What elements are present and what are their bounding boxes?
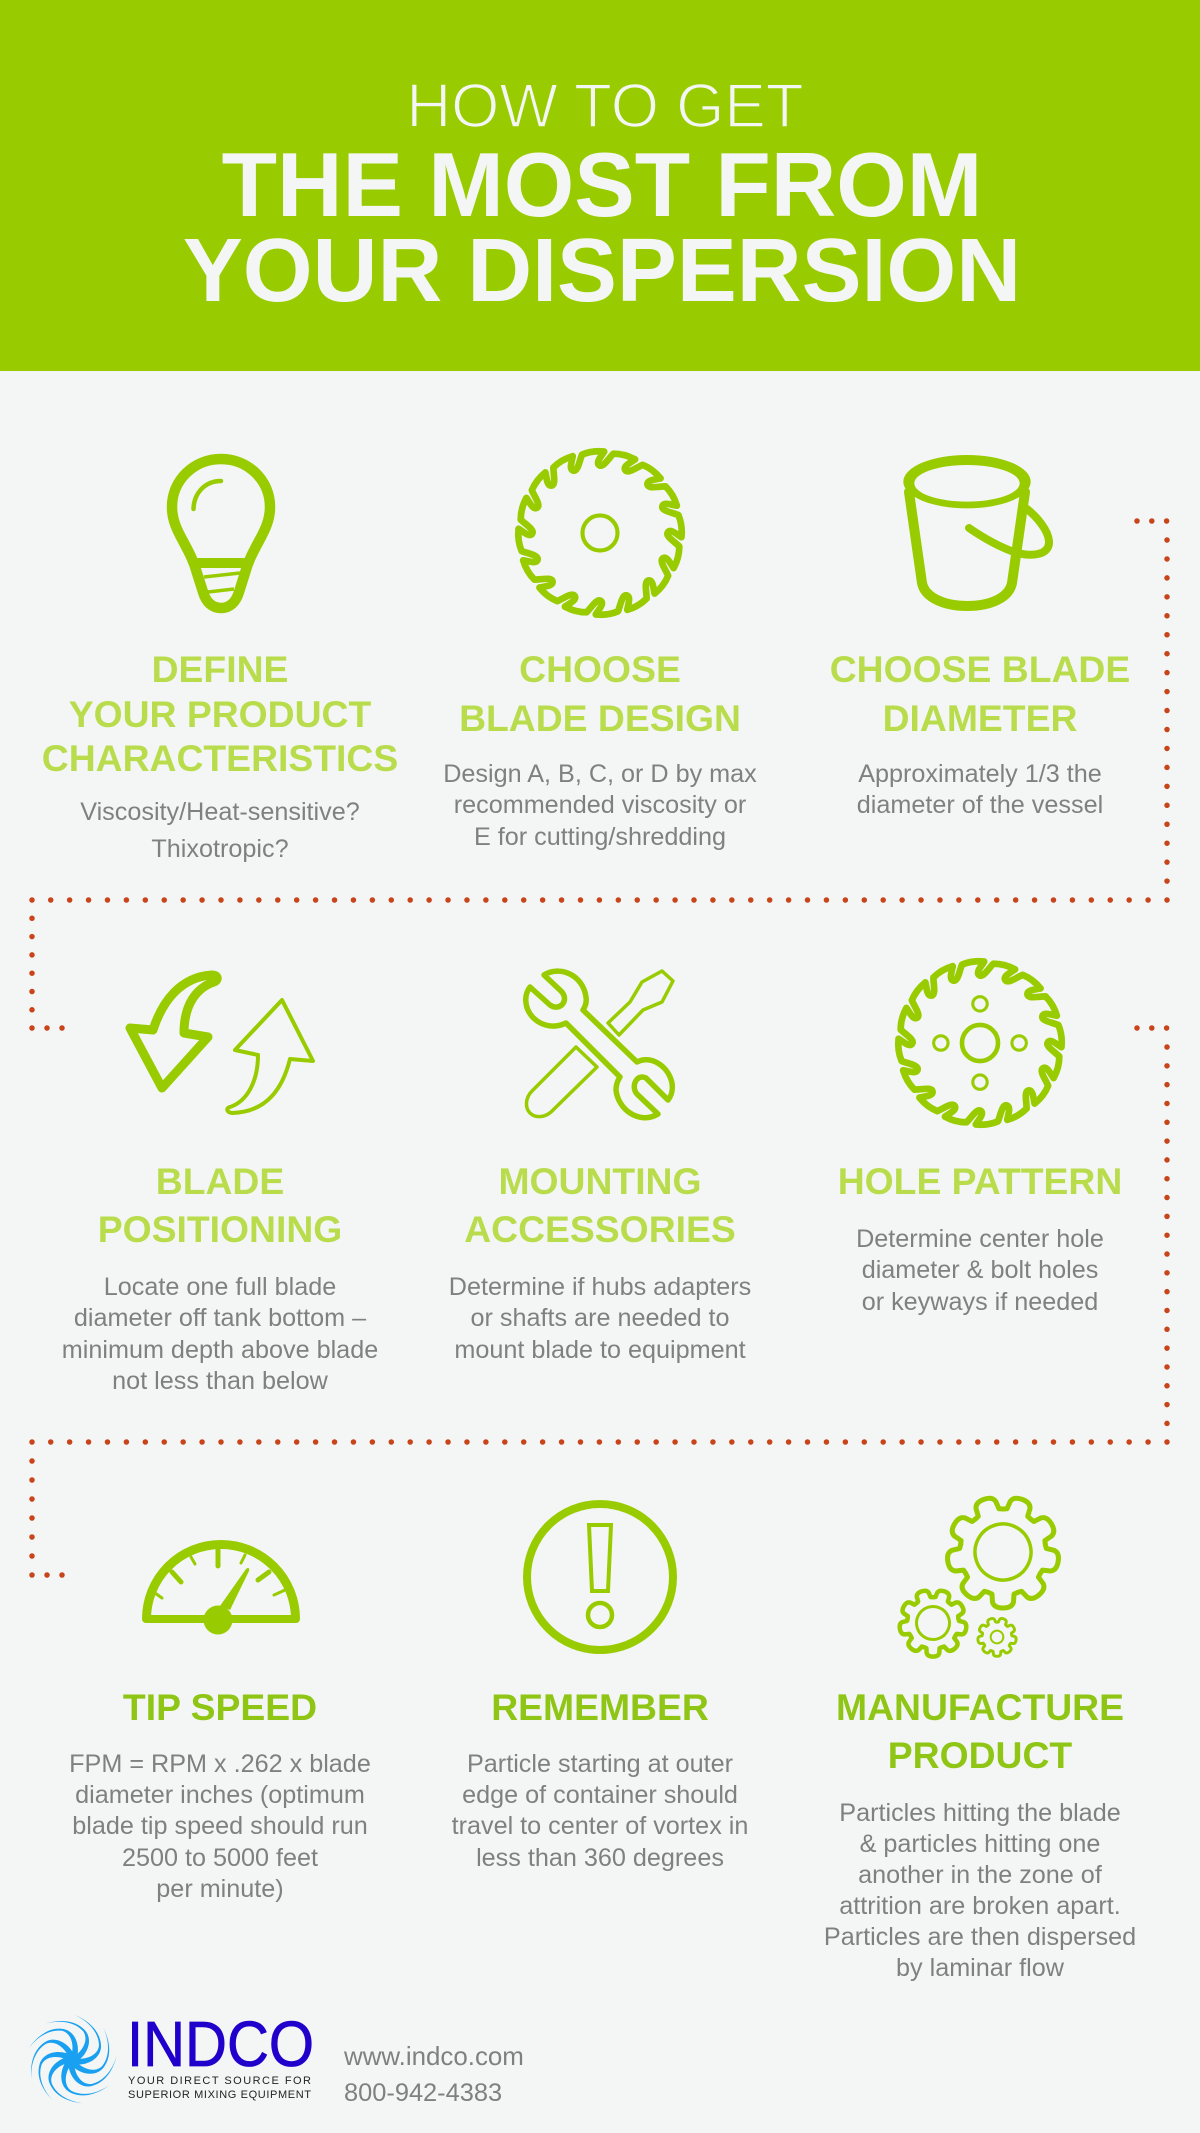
heading: DEFINE — [152, 648, 288, 690]
icon: bucket — [903, 455, 1049, 606]
logo: wordmark: INDCO — [127, 2008, 314, 2080]
description: 2500 to 5000 feet — [122, 1844, 318, 1872]
header banner — [0, 0, 1200, 371]
logo: wordmark: YOUR DIRECT SOURCE FOR — [128, 2075, 311, 2087]
description: blade tip speed should run — [72, 1812, 368, 1840]
description: travel to center of vortex in — [452, 1812, 748, 1840]
panel: manufacture product — [824, 1480, 1136, 1982]
heading: HOLE PATTERN — [838, 1160, 1122, 1202]
description: per minute) — [156, 1875, 284, 1903]
description: Locate one full blade — [104, 1273, 336, 1301]
description: diameter of the vessel — [857, 791, 1103, 819]
contact details — [343, 2043, 524, 2107]
contact details: www.indco.com — [343, 2043, 524, 2071]
heading: BLADE — [156, 1160, 284, 1202]
title: THE MOST FROM — [222, 135, 982, 236]
heading: ACCESSORIES — [464, 1208, 736, 1250]
description: Particle starting at outer — [467, 1750, 733, 1778]
icon: gears — [889, 1480, 1077, 1667]
logo: wordmark: SUPERIOR MIXING EQUIPMENT — [128, 2089, 311, 2101]
description: & particles hitting one — [860, 1830, 1100, 1858]
description: not less than below — [112, 1367, 329, 1395]
heading: CHOOSE — [519, 648, 681, 690]
panel: hole pattern — [838, 954, 1122, 1316]
icon: saw blade with bolt holes — [891, 954, 1069, 1132]
contact details: 800-942-4383 — [344, 2079, 502, 2107]
icon: speedometer — [146, 1545, 296, 1634]
panel: define your product characteristics — [42, 459, 398, 863]
description: or keyways if needed — [862, 1288, 1098, 1316]
panel: remember — [452, 1504, 748, 1872]
description: diameter inches (optimum — [75, 1781, 365, 1809]
heading: YOUR PRODUCT — [69, 693, 371, 735]
description: Design A, B, C, or D by max — [443, 760, 757, 788]
icon: light bulb — [172, 459, 270, 608]
icon: wrench and screwdriver — [526, 971, 673, 1118]
panel: tip speed — [69, 1545, 371, 1903]
footer — [19, 2007, 524, 2112]
icon: rotation arrows — [130, 975, 313, 1113]
description: diameter & bolt holes — [862, 1256, 1098, 1284]
heading: CHARACTERISTICS — [42, 737, 398, 779]
description: by laminar flow — [896, 1954, 1065, 1982]
heading: POSITIONING — [98, 1208, 342, 1250]
title: HOW TO GET — [406, 72, 804, 141]
icon: exclamation circle — [527, 1504, 673, 1650]
heading: BLADE DESIGN — [459, 697, 741, 739]
title — [183, 72, 1021, 321]
heading: PRODUCT — [888, 1734, 1072, 1776]
description: Approximately 1/3 the — [858, 760, 1102, 788]
heading: DIAMETER — [883, 697, 1077, 739]
description: less than 360 degrees — [476, 1844, 724, 1872]
logo: swirl — [19, 2007, 123, 2112]
description: diameter off tank bottom – — [74, 1304, 366, 1332]
description: Particles hitting the blade — [839, 1799, 1121, 1827]
heading: TIP SPEED — [123, 1686, 317, 1728]
description: Particles are then dispersed — [824, 1923, 1136, 1951]
description: or shafts are needed to — [470, 1304, 730, 1332]
panel: blade positioning — [62, 975, 378, 1395]
heading: MANUFACTURE — [836, 1686, 1124, 1728]
heading: CHOOSE BLADE — [830, 648, 1130, 690]
description: E for cutting/shredding — [474, 823, 726, 851]
heading: MOUNTING — [498, 1160, 702, 1202]
description: Thixotropic? — [151, 835, 289, 863]
description: another in the zone of — [858, 1861, 1103, 1889]
panel: choose blade design — [443, 444, 757, 851]
description: recommended viscosity or — [454, 791, 746, 819]
heading: REMEMBER — [491, 1686, 709, 1728]
description: attrition are broken apart. — [839, 1892, 1121, 1920]
description: Determine center hole — [856, 1225, 1104, 1253]
panel: mounting accessories — [449, 971, 751, 1364]
title: YOUR DISPERSION — [183, 221, 1021, 321]
description: mount blade to equipment — [454, 1336, 746, 1364]
panel: choose blade diameter — [830, 455, 1130, 819]
description: edge of container should — [462, 1781, 738, 1809]
description: Determine if hubs adapters — [449, 1273, 751, 1301]
dotted connector: row 1 to row 2 — [32, 521, 1167, 1028]
dotted connector: row 2 to row 3 — [32, 1028, 1167, 1575]
description: minimum depth above blade — [62, 1336, 378, 1364]
description: FPM = RPM x .262 x blade — [69, 1750, 371, 1778]
icon: saw blade — [511, 444, 689, 622]
description: Viscosity/Heat-sensitive? — [80, 798, 360, 826]
